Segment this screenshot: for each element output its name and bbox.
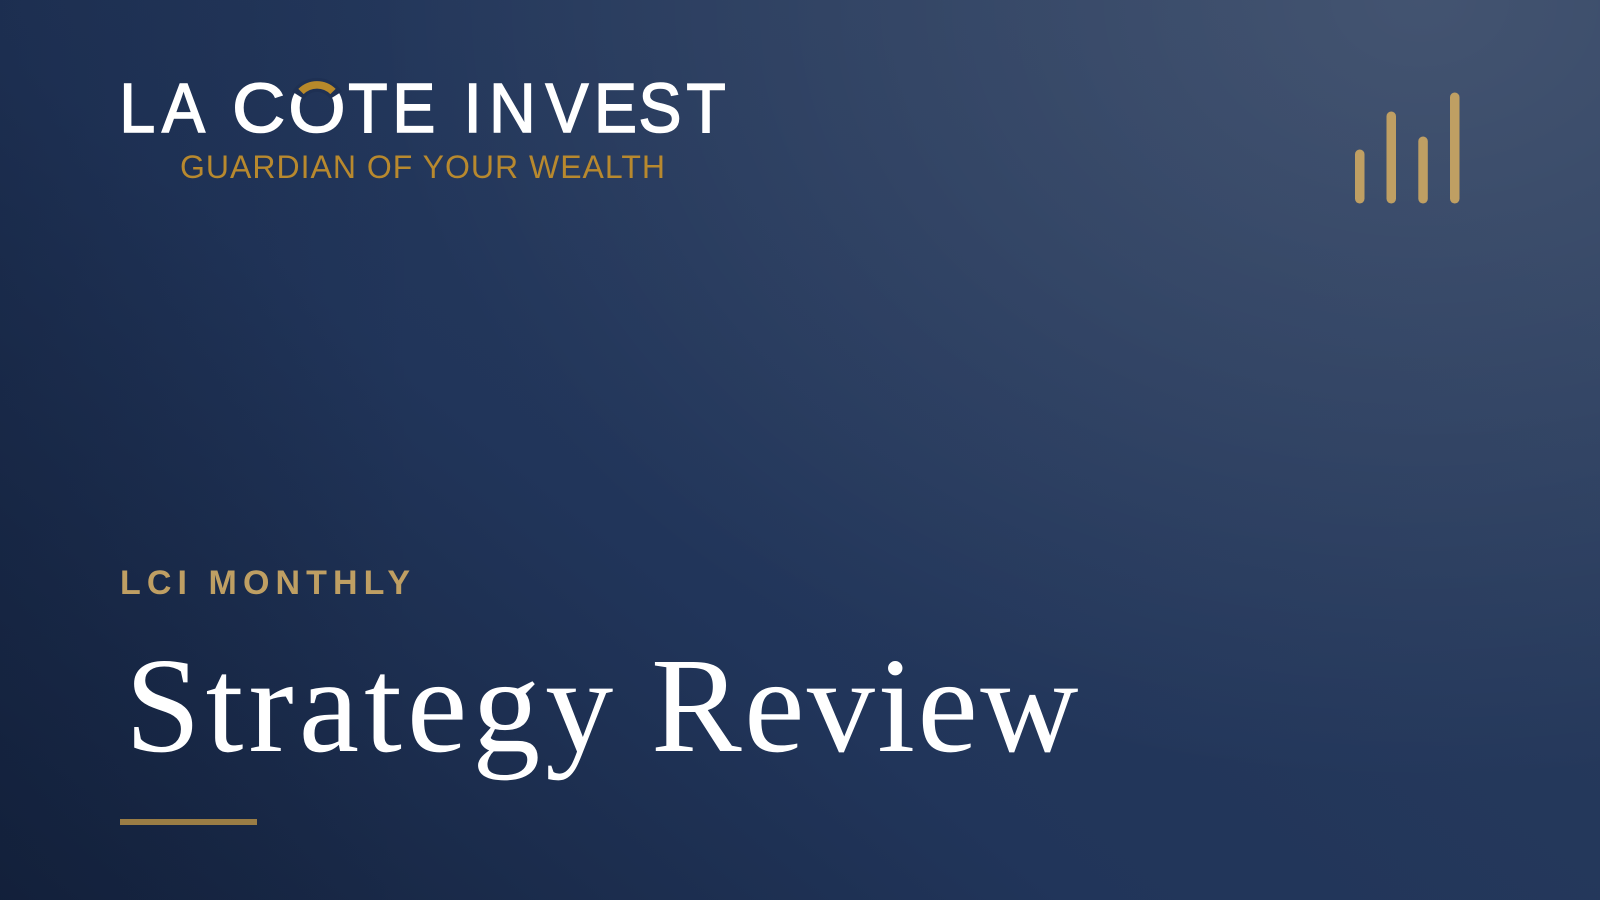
eyebrow label: LCI MONTHLY [120,564,410,602]
logo wordmark: LA [119,70,205,148]
title [125,631,1081,781]
logo wordmark: CO [232,70,346,148]
logo wordmark: TE [348,70,435,148]
title: Review [651,631,1081,781]
logo tagline: GUARDIAN OF YOUR WEALTH [180,149,665,185]
logo [119,70,726,185]
logo wordmark: INVEST [464,70,726,148]
accent rule [120,819,257,825]
icon: rising bars [1355,92,1460,204]
logo gold arc on the O [298,85,336,95]
title: Strategy [125,631,618,781]
logo wordmark [119,70,726,148]
